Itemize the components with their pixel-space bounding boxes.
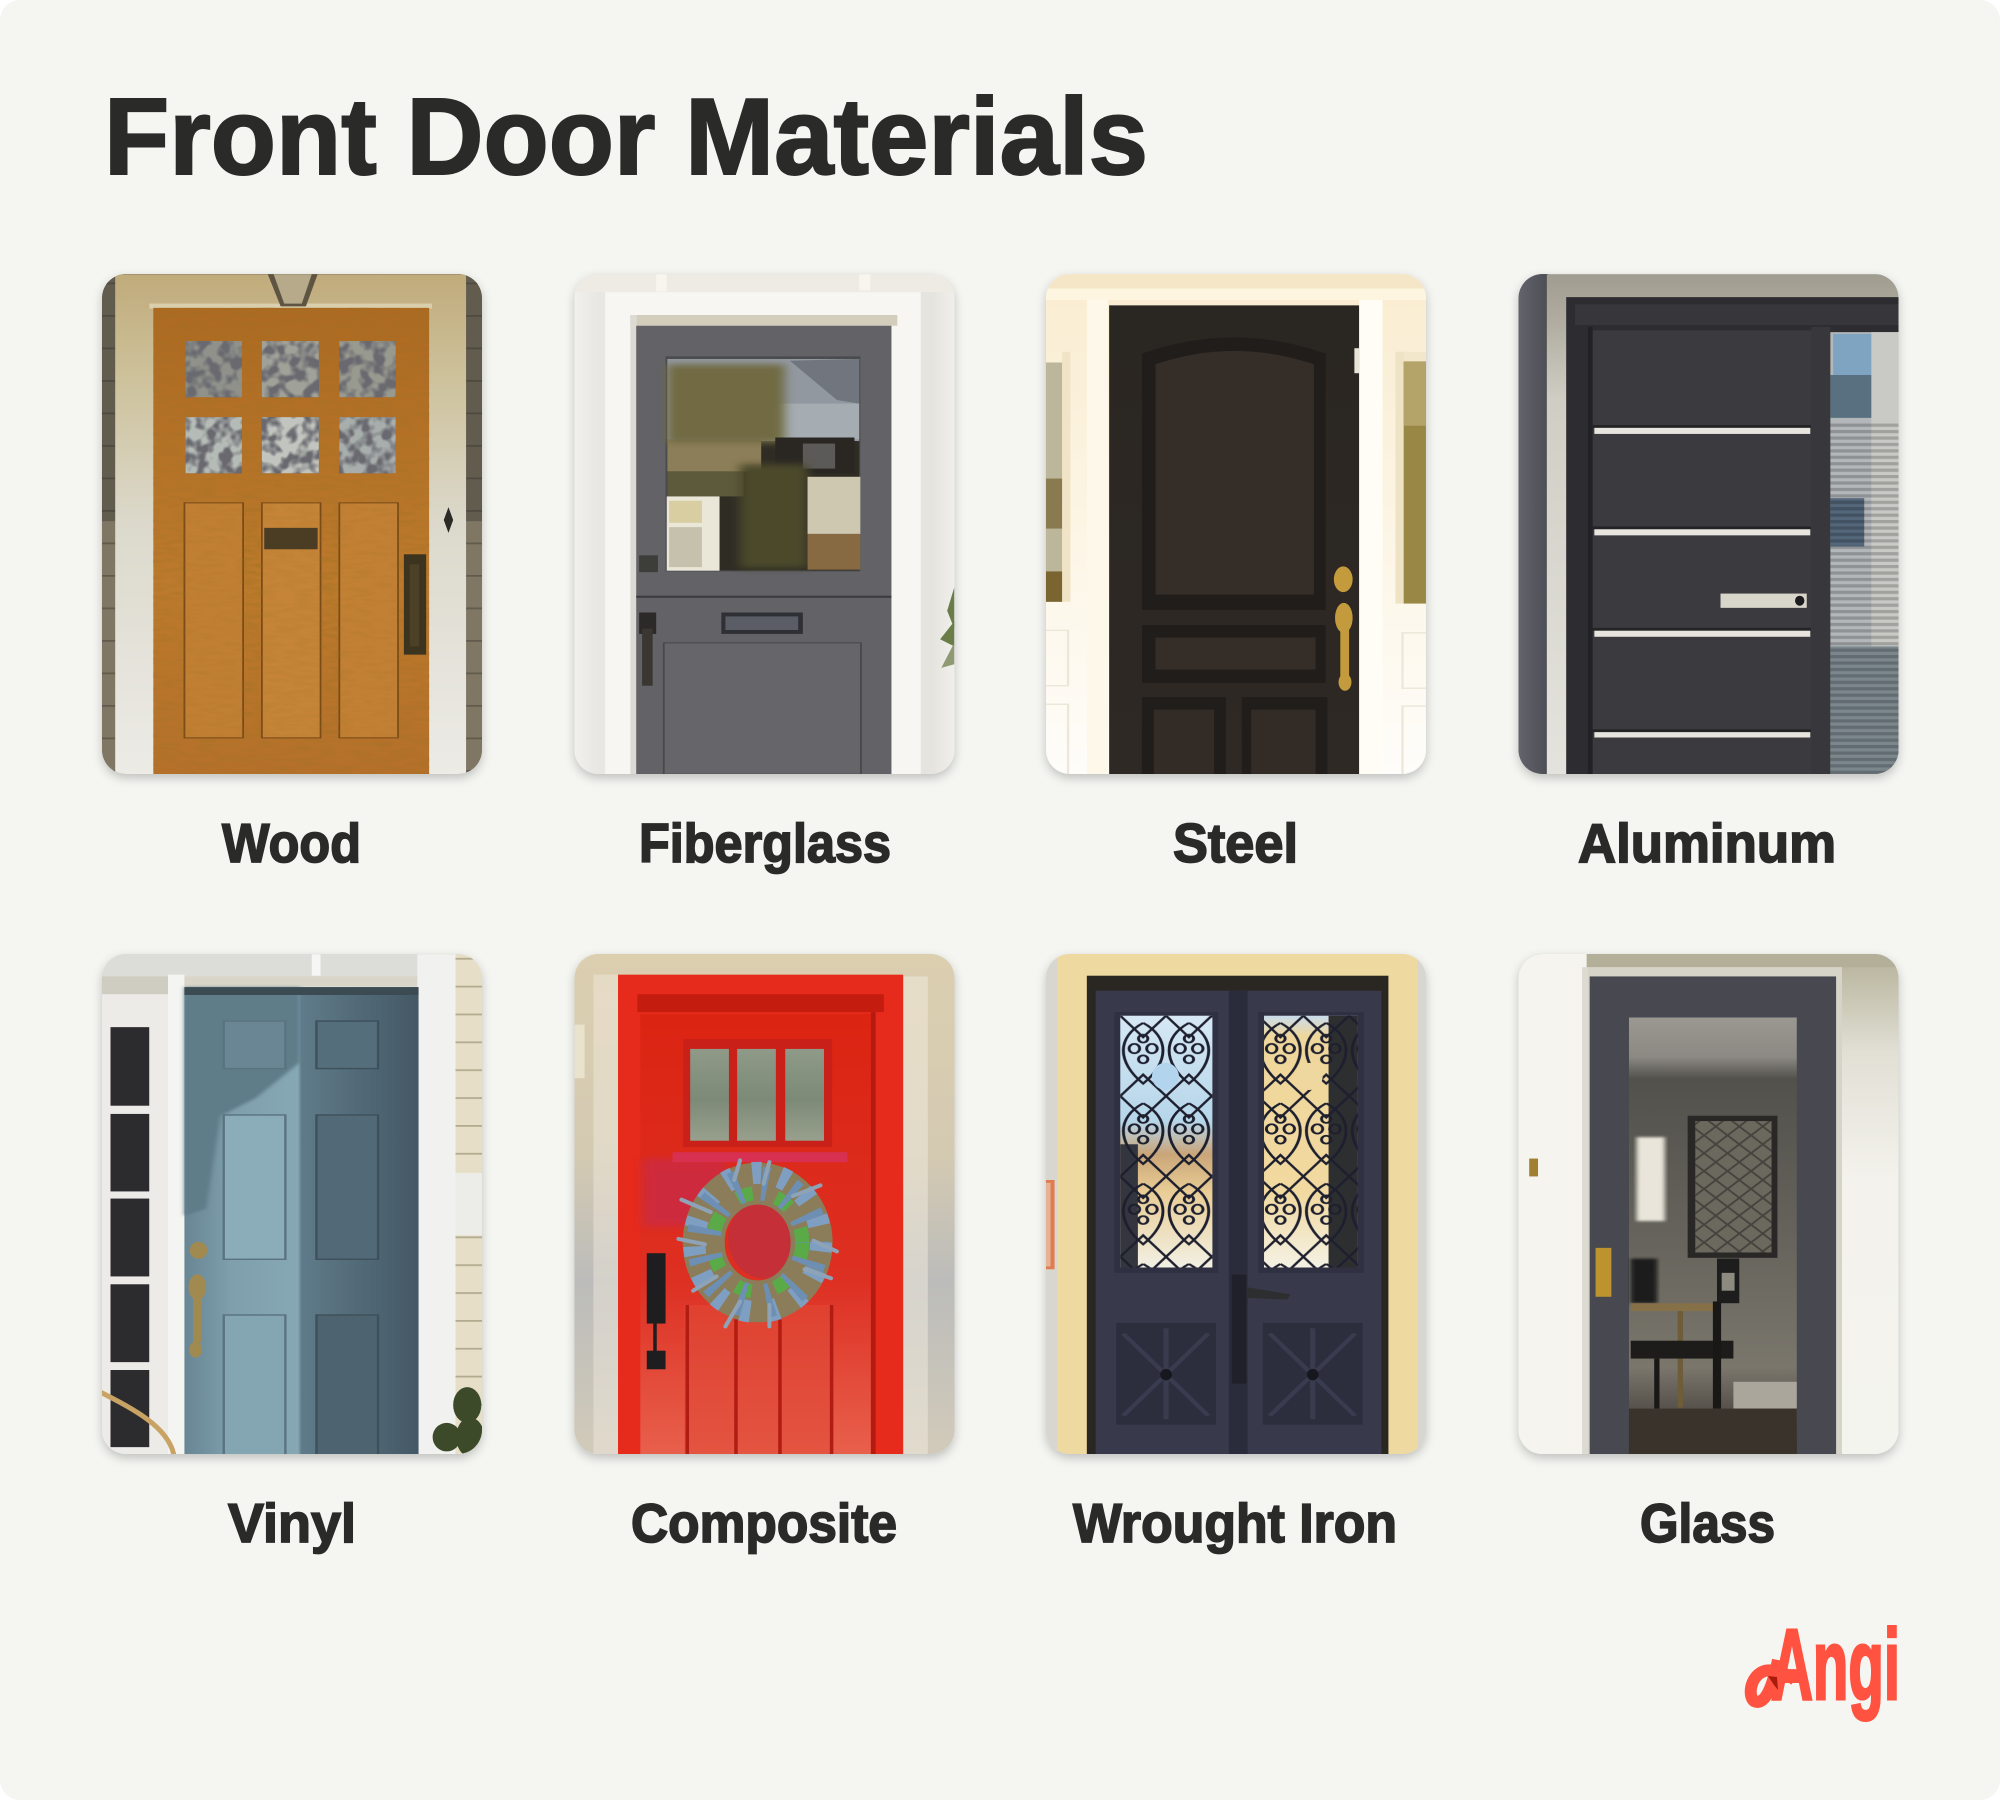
panel: steel door photo (1041, 271, 1432, 781)
panel: wood door photo (98, 271, 491, 779)
label: wood: Wood (222, 812, 361, 874)
left sidelight (1046, 352, 1070, 602)
railing (98, 1391, 174, 1455)
latch and twisted rod (1232, 1275, 1290, 1384)
wall plaque (1046, 1180, 1055, 1269)
title: Front Door Materials (104, 76, 1148, 198)
label: fiberglass: Fiberglass (639, 812, 891, 874)
sidelight panes (111, 1027, 149, 1447)
door frame (1590, 976, 1836, 1455)
brass handle set (189, 1242, 207, 1357)
right iron glass window (1264, 1016, 1358, 1267)
wreath (678, 1160, 837, 1326)
wood door slab (153, 308, 429, 774)
lower decorative panels (1116, 1323, 1363, 1425)
black door slab (1109, 305, 1359, 776)
panel: vinyl door photo (98, 951, 485, 1459)
label: steel: Steel (1173, 812, 1298, 874)
logo: Angi: Angi (1771, 1609, 1900, 1721)
shrub (433, 1387, 484, 1457)
mail slot (721, 612, 803, 634)
brass lock (1596, 1248, 1611, 1297)
label: wrought iron: Wrought Iron (1073, 1492, 1397, 1554)
pull handle (1721, 594, 1807, 608)
door handle and lock (639, 555, 658, 686)
label: vinyl: Vinyl (228, 1492, 356, 1554)
door handle (647, 1253, 666, 1369)
brass strike (1529, 1159, 1538, 1176)
door handle plate (404, 554, 426, 655)
lantern (268, 274, 318, 306)
door window (683, 1039, 832, 1147)
door window with reflection (666, 356, 860, 571)
panel: wrought iron door photo (1041, 951, 1431, 1459)
grey door slab (636, 326, 891, 774)
dark door slab with steel bars (1588, 327, 1830, 775)
plant sprig (940, 587, 954, 668)
mail slot (264, 528, 318, 549)
glass pane with interior (1629, 1017, 1797, 1455)
right sidelight (1395, 352, 1426, 604)
panel: aluminum door photo (1513, 271, 1905, 779)
label: composite: Composite (631, 1492, 897, 1554)
red frame and door (618, 975, 903, 1455)
shelf (673, 1152, 847, 1162)
doorbell (444, 507, 453, 533)
label: glass: Glass (1640, 1492, 1775, 1554)
window panes (186, 341, 396, 473)
brass handle set (1334, 566, 1353, 691)
iron door slab (1096, 991, 1381, 1455)
left iron glass window (1120, 1016, 1212, 1267)
panel: glass door photo (1513, 951, 1904, 1459)
label: aluminum: Aluminum (1578, 812, 1836, 874)
side glass with blinds (1830, 332, 1901, 775)
siding (456, 954, 482, 1454)
blue door slab (184, 987, 419, 1456)
panel: fiberglass door photo (570, 271, 960, 779)
panel: composite door photo (570, 951, 960, 1459)
logo: Angi (1751, 1609, 1900, 1721)
